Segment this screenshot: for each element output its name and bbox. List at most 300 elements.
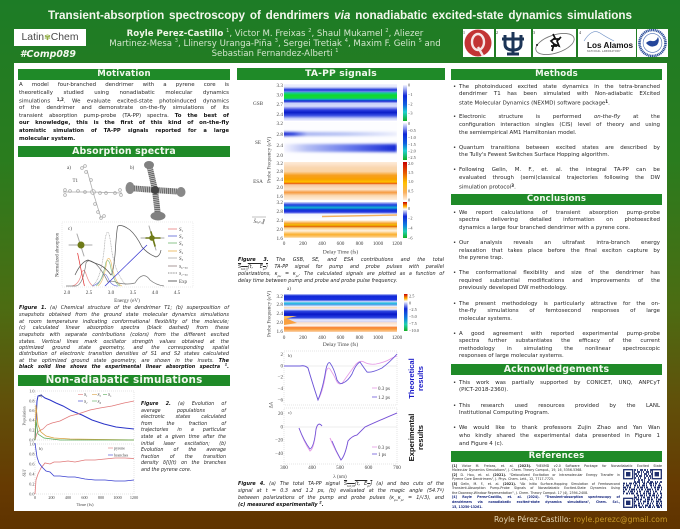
population chart a: S₄ [98,399,102,404]
text block: conclusions: We report calculations of transient absorption pump-probe [459,210,660,216]
heatmap: GSB: 2.4 [277,112,283,118]
axes labels: Normalized absorption [56,232,60,277]
text block: references: [4] Royle Perez-Castillo, et. al. (2024). "Transient-absorption spectroscopy of [452,494,620,498]
legend: S₄ [179,250,184,255]
caption: figure 2: density δ[i](t) on the branches [141,461,226,466]
QR code [623,469,662,508]
text block: acknowledgements: and Figure 4 (c). [459,441,503,447]
text block: conclusions [453,210,660,359]
heatmap: total signal: −4 [408,226,413,230]
heatmap: GSB: −1 [408,92,413,97]
axes labels: 4.5 [174,290,181,296]
text block: references: Molecular Dynamics Simulations", J. Chem. Theory Comput., 19, 16, 5356-5368. [452,468,582,472]
text block: methods: Following Gelin, M. F., et. al. the integral TA-PP can be [459,167,660,173]
chemical structure a: T1 [72,179,79,184]
text block: methods: state Molecular Dynamics (NEXMD) software package1. [459,99,610,106]
text block: acknowledgements: This research used resources provided by the LANL [459,403,660,409]
text block: conclusions: • [453,270,456,276]
heatmap: total signal: S̄ₜₒₜ,∥ [253,218,265,225]
transition density chart b: 200 [48,495,55,500]
caption: figure 4: signal at t = 0.3 and 1.2 ps, (b) evaluated at the magic angle (54.7º) [238,488,444,494]
population chart a: Population [22,406,26,426]
heatmap: SE: −2.5 [408,155,416,160]
heatmap: ESA: 2.8 [277,169,283,175]
heatmap: SE: 0 [408,121,410,126]
text block: methods: • [453,84,456,90]
transition density chart b: 400 [65,495,71,500]
logo: Los Alamos [578,29,636,57]
heatmap: GSB: −3 [408,110,413,116]
chemical structure a: a) [67,166,71,171]
caption: figure 1: black solid line shows the experimental linear absorption spectra 1 . [19,362,229,370]
logo: Los Alamos: 4 [579,30,581,35]
transition density chart b: Time (fs) [76,502,94,507]
heading: motivation [18,69,230,80]
heatmap: ESA: 2.0 [408,161,413,166]
heatmap: SE: 2.8 [277,132,283,138]
figure 4c line chart: 400 [308,465,316,471]
heading: absorption spectra [18,146,230,157]
transition density chart b: 0.6 [29,462,34,466]
caption: figure 1: at the optimized ground state geometry, are shown in the insets. The [19,358,229,364]
caption: figure 4: Figure 4. (a) The total TA-PP signal Stot,M(t, Epr) (a) and two cuts of the [238,481,444,488]
transition density chart b: 600 [81,495,88,500]
text block: conclusions: the-fly simulations of femtosecond responses of large [459,308,660,314]
figure 4a heatmap: 0 [409,300,411,306]
conference tag: #Comp089 [20,49,76,60]
caption: figure 3: delay time between pump and probe and probe pulse frequency. [238,278,397,284]
caption: figure 1: states. Vertical lines mark oscillator strength values obtained at the [19,339,229,345]
figure 4c line chart: 700 [393,465,401,471]
text block: acknowledgements: • [453,425,456,431]
axes labels: 3.5 [130,290,137,296]
heatmap: SE: −1.5 [408,142,416,147]
heatmap: GSB: GSB [253,101,264,107]
figure 4a heatmap: −7.5 [409,321,417,326]
superposition snapshots b [126,161,186,220]
transition density chart b: δ[i] [22,469,26,476]
chemical structure a [63,165,122,219]
figure 3 heatmaps: 1000 [373,241,384,247]
panel: non-adiabatic simulations [18,374,230,507]
text block: conclusions: • [453,210,456,216]
population chart a: 0.8 [29,398,34,404]
heading: conclusions: Conclusions [527,194,586,204]
figure 3 heatmaps: Delay Time (fs) [323,248,358,256]
population chart a: 0.4 [29,418,35,422]
panel: TA-PP signals [237,68,445,508]
caption: figure 1: at room temperature indicating conformational flexibility of the molecule; [19,319,229,325]
text block: methods: configuration interaction singles (CIS) level of theory and using [459,122,660,128]
text block: motivation: of the dendrimer and demonstrate on-the-fly simulations of its [19,105,229,111]
heatmap: SE: −0.5 [408,128,416,133]
text block: methods: Electronic structure is performed on-the-fly at the [459,114,660,120]
panel: absorption spectra [18,146,230,370]
figure 4a heatmap: 1.6 [277,329,283,335]
axes labels: 3.0 [108,290,115,296]
text block: references [452,464,662,508]
caption: figure 1 [19,305,230,370]
heatmap: SE: 2.0 [277,153,283,159]
legend: S₁₋₅₀ [179,271,188,276]
text block: conclusions: dynamics a large four branched dendrimer with a pyrene core. [459,225,630,231]
heatmap: GSB: 3.3 [277,83,283,89]
inset molecules [69,226,164,256]
text block: conclusions: required substantial modifications and improvements of the [459,278,660,284]
heatmap: total signal [252,200,413,242]
figure 4c line chart: 600 [365,465,373,471]
heading: absorption spectra: Absorption spectra [72,146,176,157]
caption: figure 2: Evolution of the average [141,448,226,453]
text block: motivation: A model four-branched dendrimer with a pyrene core is [19,82,229,88]
text block: conclusions: A good agreement with reported experimental pump-probe [459,331,660,337]
heatmap: total signal: 0 [408,206,410,211]
figure 4c line chart: 500 [336,465,344,471]
text block: conclusions: responses of large molecular systems. [459,353,564,359]
text block: acknowledgements: who kindly shared the experimental data presented in Figure 1 [459,433,660,439]
text block: methods: The photoinduced excited state dynamics in the tetra-branched [459,84,660,90]
label: theoretical results: results [416,366,425,391]
text block: acknowledgements: Institutional Computing Program. [459,410,549,416]
text block: references: [1] Victor M. Freixas, et. al. (2023). "NEXMD v2.0 Software Package for Nonadiabatic Excited State [452,464,662,468]
transition density chart b [22,442,138,507]
figure 4b line chart: 0 [280,364,284,370]
caption: figure 4: between polarizations of the pump and probe pulses (κpuκpr = 1/√3), and [238,495,444,502]
population chart a: S₅ [108,392,112,397]
heading: methods [451,69,662,80]
figure 4a heatmap: Delay Time (fs) [323,341,358,348]
figure 4c line chart: c) [288,410,292,415]
heatmap: SE: −1.0 [408,135,416,140]
figure 4b line chart: ΔA [270,401,274,408]
text block: acknowledgements: We would like to thank professors Zujin Zhao and Yan Wan [459,425,660,431]
transition density chart b: 1000 [113,495,122,500]
caption: figure 2: from the fraction of [141,422,226,427]
caption: figure 2: and the pyrene core. [141,468,191,473]
heatmap: total signal: 1.6 [277,236,283,242]
logo: institution 5 [637,29,668,57]
heatmap: GSB: 2.7 [277,102,283,108]
caption: figure 2: state at a given time after the [141,435,226,440]
heatmap: ESA: 1.0 [408,179,413,184]
figure 4a heatmap: −5.0 [409,314,417,319]
text block: methods: the semiempirical AM1 Hamiltonian model. [459,130,576,136]
caption: figure 2: Figure 2. (a) Evolution of [141,402,226,407]
figure 4b line chart: −4 [278,387,283,392]
figure 3 heatmaps: 400 [318,241,326,247]
text block: motivation: our knowledge, this is the first of this kind of on-the-fly [19,120,229,126]
text block: motivation [19,82,229,142]
axes labels: 2.0 [64,290,71,296]
figure 4b line chart: −2 [278,376,283,380]
panel: conclusions [451,194,662,359]
figure 4c line chart [275,408,401,480]
heading: non-adiabatic simulations: Non-adiabatic simulations [46,374,202,386]
caption: figure 3 [238,256,445,284]
logo: institution 3 [533,29,576,57]
caption: figure 2: trajectories in a particular [141,428,226,433]
text block: conclusions: The conformational flexibility and size of the dendrimer has [459,270,660,276]
population chart a: S₁ [84,392,88,397]
caption: figure 1: (c) calculated linear absorption spectra (black dashed) from these [19,325,229,331]
figure 4c line chart: 1 ps [378,453,386,458]
population chart a: 0.0 [29,438,34,442]
legend: S₂ [179,235,184,240]
heatmap: total signal: 3.2 [277,200,283,206]
caption: figure 1: snapshots with separate contributions (colors) from the different excited [19,332,229,338]
text block: acknowledgements: • [453,380,456,386]
figure 3 heatmaps: 200 [299,241,307,247]
figure 4a heatmap: 3.2 [277,294,283,300]
heatmap: total signal: 2.8 [277,209,283,215]
text block: conclusions: • [453,301,456,307]
heatmap: ESA: 2.4 [277,177,283,183]
heading: acknowledgements: Acknowledgements [504,364,609,375]
figure 4c line chart: −40 [275,452,283,457]
label: theoretical results [407,358,425,399]
figure 4a heatmap: −2.5 [409,307,417,312]
population chart a: 0.2 [29,428,34,432]
heading: motivation: Motivation [97,69,151,79]
population chart a: S₂ [84,399,88,404]
figure 4c line chart: 0 [280,426,284,430]
heatmap: GSB: 0 [408,82,410,88]
caption: figure 1: distribution of electronic transition densities of S1 and S2 states calculated [19,351,229,357]
figure 4b line chart: 2 [280,353,284,358]
caption: figure 2: electronic states calculated [141,415,226,420]
heatmap: SE: 3.2 [277,121,283,127]
text block: references: Transient-Absorption Pump-Probe Signals of Nonadiabatic Excited-State Dynamics Using [452,486,620,490]
text block: conclusions: the pyrene trap. [459,255,503,261]
text block: conclusions: The present methodology is particularly attractive for the on- [459,301,660,307]
transition density chart b: 1.0 [29,442,34,446]
authors: Royle Perez-Castillo 1, Victor M. Freixas 2, Shaul Mukamel 2, Aliezer [127,28,423,39]
figure 3 heatmaps: 1200 [392,241,403,247]
caption: figure 2: fraction of the transition [141,455,226,460]
axes labels: 2.5 [86,290,93,296]
logo: institution 1: 1 [463,30,465,35]
text block: conclusions: methodology in simulating the nonlinear spectroscopic [459,346,660,352]
figure 4a heatmap: 0 [283,335,286,341]
heading: acknowledgements [451,364,662,375]
heatmap: ESA [253,161,413,202]
transition density chart b: 0.8 [29,452,34,456]
axes labels [56,232,181,304]
heatmap: ESA: 1.5 [408,170,413,175]
population chart a: 0.6 [29,408,34,413]
transition density chart b: branches [114,452,129,458]
heatmap: GSB: 3.0 [277,92,283,98]
figure 4b line chart: −6 [278,398,283,404]
figure 3 heatmaps: 600 [337,241,345,247]
legend: S₁ [179,228,184,233]
heatmap: GSB: −2 [408,102,413,106]
heatmap: total signal: 2.0 [277,227,283,233]
legend: S₅ [179,257,184,262]
text block: references: [3] Gelin, M. F., et. al. (2021). "Ab Initio Surface-Hopping Simulation of Femtosecond [452,482,620,486]
caption: figure 4 [238,480,444,508]
transition density chart b: 0.4 [29,472,35,476]
transition density chart b: b) [39,446,43,451]
text block: references: 15, 13250-13261. [452,504,483,508]
heatmap: ESA: 1.6 [277,194,283,200]
caption: figure 2: initial laser excitation; (b) [141,442,226,447]
text block: methods: • [453,114,456,120]
heatmap: ESA: 0 [408,198,410,202]
logo: institution 3: 3 [533,30,535,35]
caption: figure 3: Stot,∥(t, Epr) TA-PP signal for pump and probe pulses with parallel [238,264,444,270]
text block: motivation: theoretically studied using nonadiabatic molecular dynamics [19,90,229,96]
text block: acknowledgements: (PICT-2018-2360). [459,387,508,393]
text block: acknowledgements: This work was partially supported by CONICET, UNQ, ANPCyT [459,380,660,386]
heatmap: ESA: 3.2 [277,161,283,167]
figure 4b line chart: 1.2 ps [378,396,390,401]
text block: motivation: molecular system. [19,136,75,142]
text block: conclusions: spectra further substantiates the efficacy of the current [459,338,660,344]
text block: conclusions: molecular systems. [459,316,512,322]
figure 4a heatmap: 800 [356,335,364,341]
excited state curves [66,226,164,286]
text block: conclusions: Our analysis reveals an ultrafast intra-branch energy [459,240,660,246]
text block: motivation: atomistic simulation of TA-PP signals reported for a large [19,128,229,134]
absorption chart c [56,222,193,304]
caption: figure 2 [141,401,227,473]
heading: references [451,451,662,462]
figure 4a heatmap: 1000 [373,335,384,341]
text block: conclusions: • [453,240,456,246]
text block: conclusions: previously developed DW methodology. [459,285,567,291]
text block: methods: • [453,167,456,173]
caption: figure 1: optimized ground state geometry, and the corresponding spatial [19,345,229,351]
transition density chart b: 800 [98,495,104,500]
figure 4c line chart: 300 [280,465,288,471]
figure 4a heatmap: 2.0 [277,320,283,326]
figure 3 heatmaps [252,82,416,256]
logo: LatinChem: Latin✾Chem [22,32,78,43]
text block: methods: the Tully's Fewest Switches Surface Hopping algorithm. [459,152,609,158]
axes labels: 4.0 [152,290,159,296]
heading: methods: Methods [535,69,578,79]
figure 4c line chart: λ (nm) [333,475,347,480]
logo: institution 2: 2 [496,30,498,35]
figure 4a heatmap: 600 [337,335,345,341]
transition density chart b: pyrene [114,446,125,450]
caption: figure 4: (c) measured experimentally 2. [238,500,324,508]
figure 4c line chart: 0.3 ps [378,446,390,451]
population chart a: S₃ [98,392,102,397]
figure 4c line chart: −20 [275,438,283,444]
caption: figure 2: average populations of [141,409,226,414]
text block: methods [453,84,660,190]
heatmap: ESA: 2.0 [277,185,283,191]
text block: references: the Doorway-Window Representation", J. Chem. Theory Comput. 17 (4), 2394-2408. [452,490,588,494]
legend: S₃ [179,242,184,247]
text block: methods: simulation protocol3. [459,183,516,190]
figure 4a heatmap: 1200 [392,335,403,341]
text block: conclusions: • [453,331,456,337]
figure 4b line chart [270,351,397,408]
caption: figure 1: Figure 1. (a) Chemical structure of the dendrimer T1; (b) superposition of [19,305,229,311]
footer contact: Royle Pérez-Castillo: royle.perezc@gmail.com [494,515,667,524]
title: Transient-absorption spectroscopy of dendrimers via nonadiabatic excited-state dynamics simulations [48,9,632,22]
figure 4a heatmap: Probe Frequency (eV) [266,291,272,337]
heatmap: ESA: 0.5 [408,188,413,194]
panel: methods [451,69,662,190]
heatmap: ESA: ESA [253,179,263,185]
text block: acknowledgements: • [453,403,456,409]
text block: methods: Quantum transitions between excited states are described by [459,145,660,151]
legend: S₆₋₅₀ [179,264,188,269]
figure 4a heatmap: 400 [318,335,326,341]
superposition snapshots b: b) [130,166,134,171]
authors: Martinez-Mesa 3, Llinersy Uranga-Piña 3, Sergei Tretiak 4, Maxim F. Gelin 5 and [109,38,441,49]
authors [109,28,441,59]
heatmap: SE [255,121,416,160]
figure 4a heatmap: 2.5 [409,294,414,298]
figure 4c line chart: 20 [278,412,284,417]
logo: Los Alamos: NATIONAL LABORATORY [587,50,621,53]
population chart a: a) [39,393,43,398]
figure 3 heatmaps: 800 [356,241,364,247]
logo: LatinChem [14,29,86,46]
logo: institution 2 [496,29,531,57]
transition density chart b: 0.2 [29,482,34,486]
label: theoretical results: Theoretical [407,358,416,399]
caption: figure 3: polarizations, κpu = κpr. The calculated signals are plotted as a function of [238,270,444,277]
text block: references: Pyrene Core Dendrimers", J. Phys. Chem. Lett., 12, 7717-7725. [452,477,554,481]
authors: Sebastian Fernandez-Alberti 1 [212,48,338,59]
heading: conclusions [451,194,662,205]
population chart a [22,388,134,442]
label: experimental results [407,414,425,461]
text block: references: dendrimers via nonadiabatic excited-state dynamics simulations", Chem. Sci., [452,500,620,504]
caption: figure 1: snapshots obtained from the ground state molecular dynamics simulations [19,312,229,318]
panel: references [451,451,662,508]
logo: Los Alamos: Los Alamos [587,41,634,50]
text block: conclusions: relaxation that takes place before the final exciton capture by [459,248,660,254]
figure 4a heatmap: −10.0 [409,328,419,333]
heatmap: total signal: −2 [408,216,413,220]
text block: methods: evaluated through (semi)classical trajectories following the DW [459,175,660,181]
heatmap: SE: −2.0 [408,148,416,154]
text block: methods: • [453,145,456,151]
population chart a: 1.0 [29,388,34,394]
heading: TA-PP signals: TA-PP signals [305,68,377,79]
figure 3 heatmaps: Probe Frequency (eV) [266,137,272,183]
transition density chart b: 0.0 [29,492,34,496]
text block: motivation: simulations 1,2. We evaluate excited-state photoinduced dynamics [19,97,229,104]
caption: figure 3: Figure 3. The GSB, SE, and ESA contributions and the total [238,256,444,262]
figure 4a heatmap: 2.4 [277,311,283,317]
legend: Exp [179,280,188,285]
label: experimental results: Experimental [407,414,416,461]
heading: TA-PP signals [237,68,445,80]
heatmap: total signal: −6 [408,236,413,240]
figure 4b line chart: 0.3 ps [378,387,390,392]
text block: acknowledgements [453,380,660,447]
axes labels: Energy (eV) [114,297,140,304]
figure 4a heatmap [266,287,419,348]
text block: conclusions: spectra delivering detailed information on photoexcited [459,217,660,223]
figure 3 heatmaps: 0 [283,241,286,247]
absorption chart c: c) [68,227,72,232]
heatmap: SE: SE [255,140,261,146]
heading: references: References [529,451,584,461]
figure 4a heatmap: 2.8 [277,302,283,308]
label: experimental results: results [416,425,425,450]
text block: motivation: transient absorption pump-probe (TA-PP) spectra. To the best of [19,113,229,119]
logo: institution 1 [463,29,494,57]
